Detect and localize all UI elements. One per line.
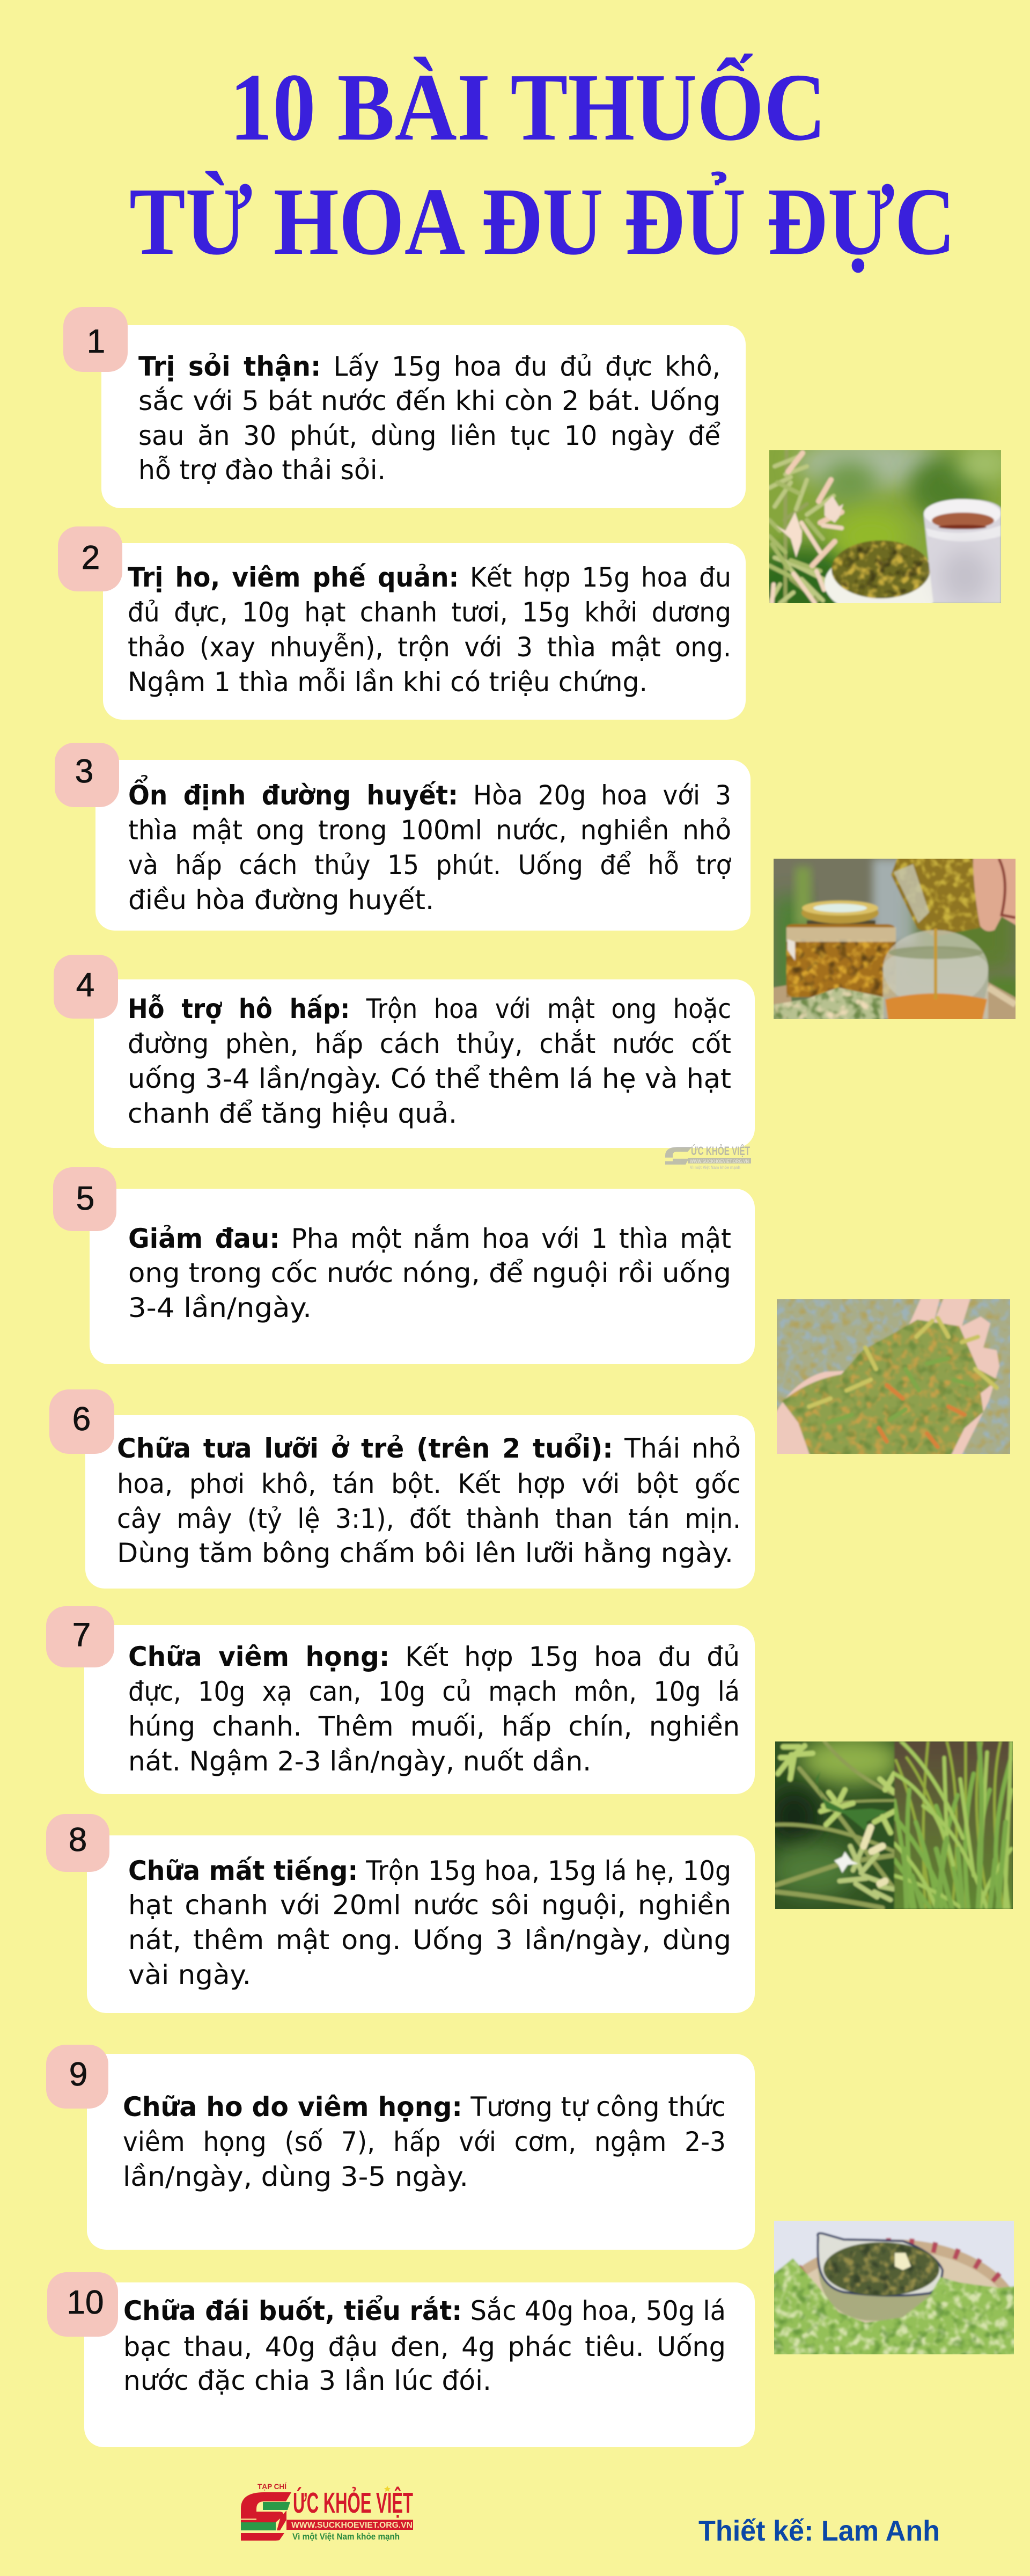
panel: remedy 3: 3 xyxy=(75,753,93,790)
panel: remedy 2 xyxy=(58,526,746,720)
panel: remedy 9: 9 xyxy=(69,2056,87,2093)
panel: remedy 2: Ngậm 1 thìa mỗi lần khi có triệu chứng. xyxy=(128,667,648,698)
designer credit: Thiết kế: Lam Anh xyxy=(698,2515,940,2547)
panel: remedy 7: nát. Ngậm 2-3 lần/ngày, nuốt dần. xyxy=(128,1746,591,1777)
panel: remedy 9: lần/ngày, dùng 3-5 ngày. xyxy=(123,2161,468,2192)
panel: remedy 2: thảo (xay nhuyễn), trộn với 3 thìa mật ong. xyxy=(128,632,731,663)
panel: remedy 2: Trị ho, viêm phế quản: Kết hợp 15g hoa đu xyxy=(128,562,731,593)
panel: remedy 7: 7 xyxy=(72,1616,91,1653)
logo: Sức Khỏe Việt xyxy=(241,2482,413,2542)
panel: remedy 10 xyxy=(47,2272,755,2447)
panel: remedy 8 xyxy=(46,1814,755,2013)
panel: remedy 1: 1 xyxy=(87,323,105,360)
panel: remedy 4: uống 3-4 lần/ngày. Có thể thêm lá hẹ và hạt xyxy=(128,1063,731,1094)
panel: remedy 9: viêm họng (số 7), hấp với cơm, ngậm 2-3 xyxy=(123,2126,726,2157)
panel: remedy 5: 5 xyxy=(76,1180,94,1217)
logo: Sức Khỏe Việt: WWW.SUCKHOEVIET.ORG.VN xyxy=(291,2521,413,2530)
panel: remedy 9 xyxy=(46,2045,755,2250)
panel: remedy 8: hạt chanh với 20ml nước sôi nguội, nghiền xyxy=(128,1890,731,1921)
panel: remedy 1: sắc với 5 bát nước đến khi còn 2 bát. Uống xyxy=(138,385,720,416)
logo: Sức Khỏe Việt: TẠP CHÍ xyxy=(258,2482,287,2491)
panel: remedy 9: Chữa ho do viêm họng: Tương tự công thức xyxy=(123,2091,726,2123)
panel: remedy 5: Giảm đau: Pha một nắm hoa với 1 thìa mật xyxy=(128,1223,731,1254)
panel: remedy 1: sau ăn 30 phút, dùng liên tục 10 ngày để xyxy=(138,420,720,451)
image: papaya flower branches and chives xyxy=(775,1741,1013,1909)
panel: remedy 6: Dùng tăm bông chấm bôi lên lưỡi hằng ngày. xyxy=(117,1538,733,1569)
panel: remedy 6: Chữa tưa lưỡi ở trẻ (trên 2 tuổi): Thái nhỏ xyxy=(117,1433,741,1464)
image: handful of dried flowers xyxy=(777,1299,1010,1454)
logo: Sức Khỏe Việt: ỨC KHỎE VIỆT xyxy=(293,2486,413,2519)
panel: remedy 5 xyxy=(53,1167,755,1364)
panel: remedy 6: hoa, phơi khô, tán bột. Kết hợp với bột gốc xyxy=(117,1468,741,1499)
panel: remedy 1: hỗ trợ đào thải sỏi. xyxy=(138,455,386,486)
title xyxy=(129,53,955,275)
panel: remedy 7 xyxy=(46,1606,755,1794)
panel: remedy 10: nước đặc chia 3 lần lúc đói. xyxy=(123,2365,491,2396)
panel: remedy 2: 2 xyxy=(82,539,100,576)
title: 10 BÀI THUỐC xyxy=(230,53,826,160)
watermark logo: Vì một Việt Nam khỏe mạnh xyxy=(690,1165,740,1170)
watermark logo xyxy=(665,1144,751,1170)
panel: remedy 1: Trị sỏi thận: Lấy 15g hoa đu đủ đực khô, xyxy=(138,351,720,382)
panel: remedy 6: cây mây (tỷ lệ 3:1), đốt thành than tán mịn. xyxy=(117,1503,741,1534)
logo: Sức Khỏe Việt: Vì một Việt Nam khỏe mạnh xyxy=(292,2531,400,2542)
panel: remedy 3: điều hòa đường huyết. xyxy=(128,884,434,916)
panel: remedy 7: đực, 10g xạ can, 10g củ mạch môn, 10g lá xyxy=(128,1676,740,1707)
panel: remedy 4 xyxy=(54,955,755,1148)
panel: remedy 3: và hấp cách thủy 15 phút. Uống để hỗ trợ xyxy=(128,850,731,881)
panel: remedy 7: Chữa viêm họng: Kết hợp 15g hoa đu đủ xyxy=(128,1641,740,1672)
image: dried flowers in bowl on basket xyxy=(774,2221,1014,2354)
panel: remedy 3: Ổn định đường huyết: Hòa 20g hoa với 3 xyxy=(128,775,731,811)
panel: remedy 10: bạc thau, 40g đậu đen, 4g phác tiêu. Uống xyxy=(123,2331,726,2362)
panel: remedy 5: 3-4 lần/ngày. xyxy=(128,1292,312,1323)
panel: remedy 4: chanh để tăng hiệu quả. xyxy=(128,1098,457,1129)
panel: remedy 4: đường phèn, hấp cách thủy, chắt nước cốt xyxy=(128,1028,731,1059)
watermark logo: WWW.SUCKHOEVIET.ORG.VN xyxy=(690,1159,749,1164)
panel: remedy 1 xyxy=(63,307,746,508)
panel: remedy 3 xyxy=(55,743,751,931)
panel: remedy 3: thìa mật ong trong 100ml nước, nghiền nhỏ xyxy=(128,815,731,846)
panel: remedy 8: vài ngày. xyxy=(128,1959,251,1990)
panel: remedy 8: 8 xyxy=(69,1821,87,1858)
panel: remedy 7: húng chanh. Thêm muối, hấp chín, nghiền xyxy=(128,1711,740,1742)
panel: remedy 6 xyxy=(49,1389,755,1589)
panel: remedy 4: Hỗ trợ hô hấp: Trộn hoa với mật ong hoặc xyxy=(128,993,731,1024)
image: papaya flowers, dried tea and cup xyxy=(769,450,1001,603)
panel: remedy 8: nát, thêm mật ong. Uống 3 lần/ngày, dùng xyxy=(128,1924,731,1956)
panel: remedy 4: 4 xyxy=(76,967,94,1004)
panel: remedy 8: Chữa mất tiếng: Trộn 15g hoa, 15g lá hẹ, 10g xyxy=(128,1855,731,1886)
panel: remedy 2: đủ đực, 10g hạt chanh tươi, 15g khởi dương xyxy=(128,597,731,628)
panel: remedy 10: Chữa đái buốt, tiểu rắt: Sắc 40g hoa, 50g lá xyxy=(123,2295,726,2326)
watermark logo: ỨC KHỎE VIỆT xyxy=(691,1144,750,1158)
panel: remedy 5: ong trong cốc nước nóng, để nguội rồi uống xyxy=(128,1257,731,1289)
panel: remedy 10: 10 xyxy=(67,2284,104,2321)
panel: remedy 6: 6 xyxy=(72,1401,91,1438)
image: honey jar and glass xyxy=(774,859,1016,1019)
